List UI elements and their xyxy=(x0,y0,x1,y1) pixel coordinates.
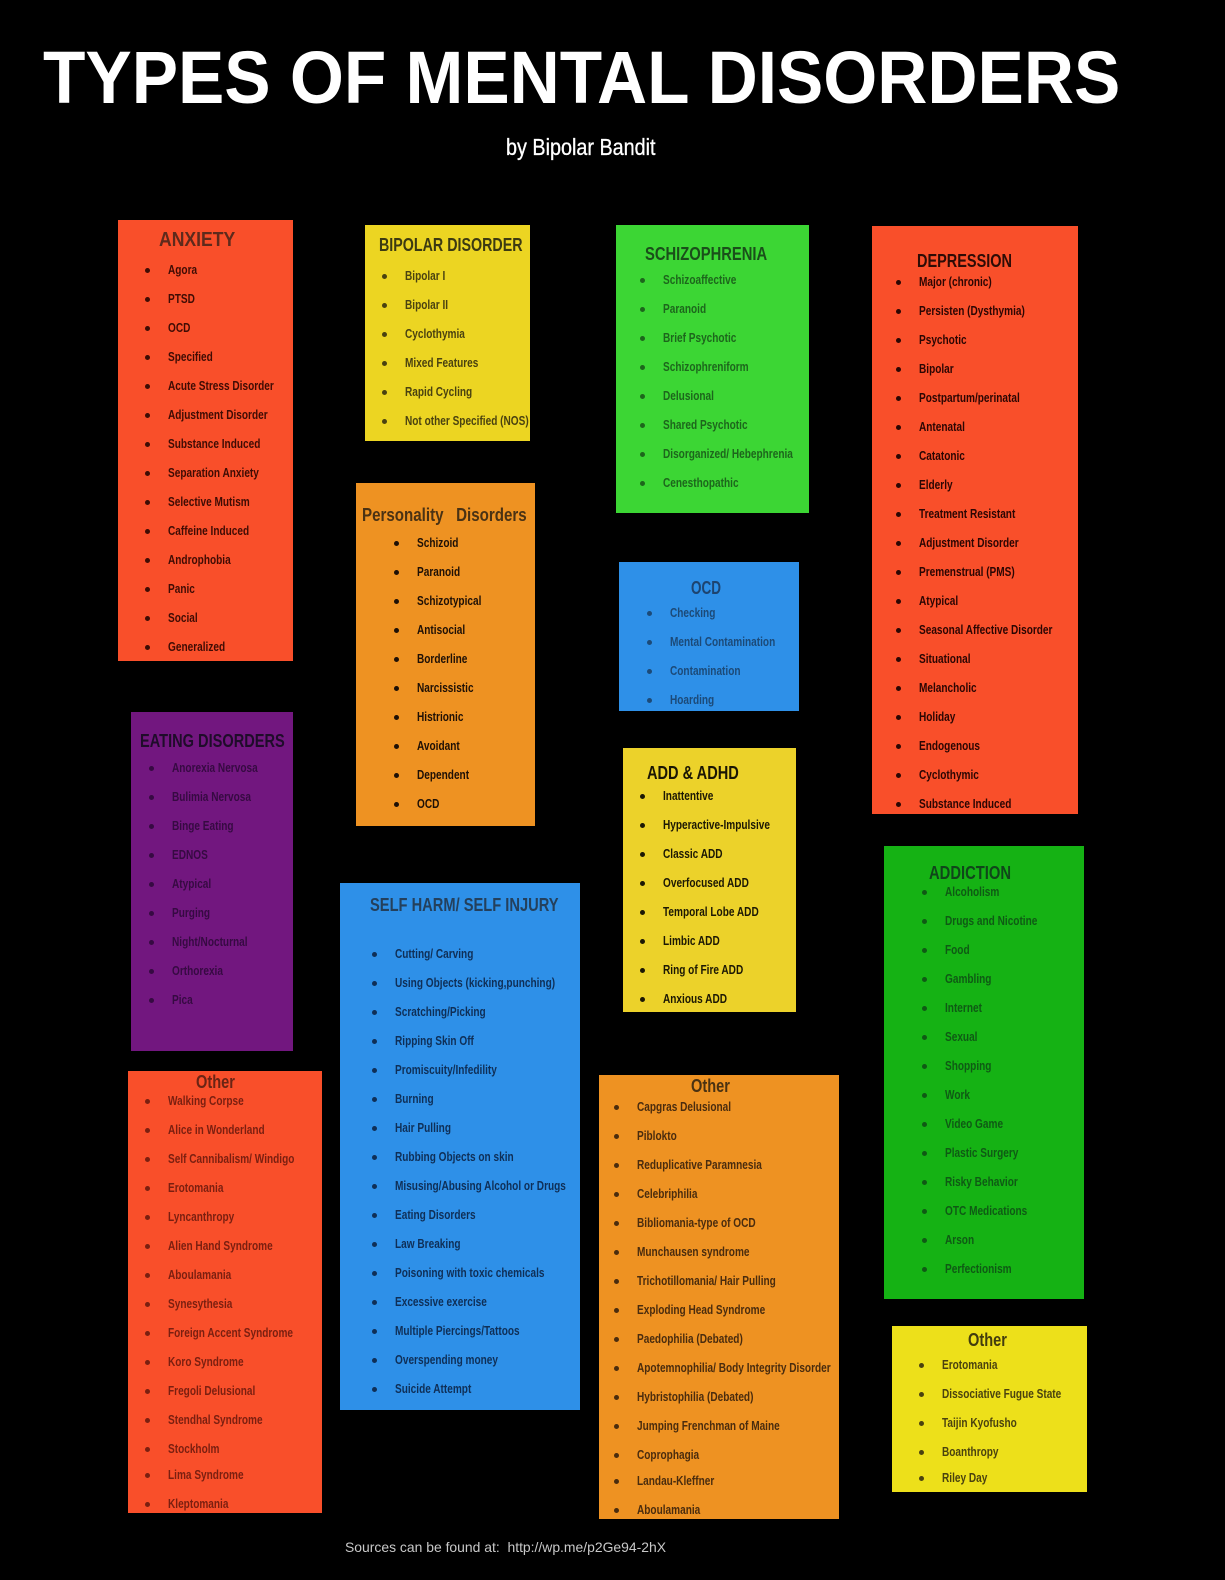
list: other orange types: Jumping Frenchman of Maine xyxy=(637,1418,780,1432)
panel: addiction xyxy=(884,846,1084,1299)
list: anxiety types: Panic xyxy=(168,580,195,596)
list: personality types: Narcissistic xyxy=(417,680,474,694)
list: schizophrenia types: Cenesthopathic xyxy=(663,474,739,490)
list: other orange types: Hybristophilia (Debated) xyxy=(637,1388,753,1404)
list: self harm types: Ripping Skin Off xyxy=(395,1032,474,1048)
list: ocd types xyxy=(647,604,775,706)
list: addiction types: OTC Medications xyxy=(945,1202,1027,1218)
list: depression types: Psychotic xyxy=(919,332,967,346)
list: other orange types: Trichotillomania/ Hair Pulling xyxy=(637,1272,776,1288)
list: addiction types: Alcoholism xyxy=(945,884,999,898)
list: depression types: Seasonal Affective Disorder xyxy=(919,622,1052,636)
heading: self harm: SELF HARM/ SELF INJURY xyxy=(370,895,559,915)
list: depression types: Antenatal xyxy=(919,418,965,434)
list: depression types: Holiday xyxy=(919,708,955,724)
list: anxiety types: OCD xyxy=(168,320,190,334)
heading: addiction: ADDICTION xyxy=(929,863,1011,883)
list: bipolar types: Bipolar I xyxy=(405,268,445,282)
list: other orange types: Piblokto xyxy=(637,1128,677,1142)
list: anxiety types: Specified xyxy=(168,348,213,364)
list: eating disorder types: Purging xyxy=(172,904,210,920)
list: ocd types: Hoarding xyxy=(670,692,714,706)
list: addiction types: Shopping xyxy=(945,1058,991,1072)
list: other yellow types: Riley Day xyxy=(942,1470,987,1484)
list: bipolar types: Cyclothymia xyxy=(405,326,465,340)
list: eating disorder types xyxy=(149,760,258,1006)
list: self harm types: Using Objects (kicking,punching) xyxy=(395,974,555,990)
list: personality types: Dependent xyxy=(417,766,469,782)
list: addiction types: Arson xyxy=(945,1232,974,1246)
list: anxiety types: Generalized xyxy=(168,638,225,654)
list: eating disorder types: Pica xyxy=(172,992,193,1006)
list: ocd types: Mental Contamination xyxy=(670,634,775,648)
list: schizophrenia types: Schizoaffective xyxy=(663,272,736,286)
list: add types: Anxious ADD xyxy=(663,990,727,1006)
heading: bipolar disorder: BIPOLAR DISORDER xyxy=(379,235,523,255)
list: schizophrenia types: Delusional xyxy=(663,388,714,402)
list: ocd types: Checking xyxy=(670,604,715,620)
list: other red types: Alice in Wonderland xyxy=(168,1122,265,1136)
list: other red types: Aboulamania xyxy=(168,1266,231,1282)
heading: other: Other xyxy=(691,1076,730,1096)
list: other orange types: Apotemnophilia/ Body Integrity Disorder xyxy=(637,1360,831,1374)
list: addiction types: Internet xyxy=(945,1000,982,1014)
subtitle: by Bipolar Bandit xyxy=(506,134,656,160)
list: add types: Hyperactive-Impulsive xyxy=(663,816,770,832)
list: eating disorder types: Night/Nocturnal xyxy=(172,934,248,948)
list: depression types: Bipolar xyxy=(919,360,954,376)
list: eating disorder types: Atypical xyxy=(172,876,211,890)
list: other orange types: Coprophagia xyxy=(637,1446,699,1462)
list: depression types: Major (chronic) xyxy=(919,274,992,288)
heading: other: Other xyxy=(196,1072,235,1092)
list: addiction types: Gambling xyxy=(945,970,991,986)
list: other red types: Kleptomania xyxy=(168,1496,228,1510)
list: addiction types: Video Game xyxy=(945,1116,1003,1130)
list: self harm types: Hair Pulling xyxy=(395,1120,451,1134)
list: bipolar types: Not other Specified (NOS) xyxy=(405,412,529,428)
list: addiction types: Work xyxy=(945,1086,970,1102)
list: add types xyxy=(640,788,770,1006)
list: other orange types: Celebriphilia xyxy=(637,1186,697,1200)
list: addiction types: Drugs and Nicotine xyxy=(945,912,1037,928)
list: anxiety types: PTSD xyxy=(168,290,195,306)
list: other red types: Lima Syndrome xyxy=(168,1466,244,1482)
list: addiction types: Plastic Surgery xyxy=(945,1144,1018,1160)
sources note: Sources can be found at: http://wp.me/p2Ge94-2hX xyxy=(345,1539,666,1555)
panel: self harm xyxy=(340,883,580,1410)
panel: other (orange) xyxy=(599,1075,839,1519)
panel: personality disorders xyxy=(356,483,535,826)
list: personality types xyxy=(394,534,481,810)
list: bipolar types: Bipolar II xyxy=(405,296,448,312)
list: other red types: Foreign Accent Syndrome xyxy=(168,1324,293,1340)
list: other orange types: Exploding Head Syndrome xyxy=(637,1302,765,1316)
list: other orange types: Reduplicative Paramnesia xyxy=(637,1156,762,1172)
list: depression types: Atypical xyxy=(919,592,958,608)
list: personality types: Histrionic xyxy=(417,708,463,724)
list: personality types: Antisocial xyxy=(417,622,465,636)
list: depression types: Substance Induced xyxy=(919,796,1011,810)
list: eating disorder types: Binge Eating xyxy=(172,818,234,832)
list: other yellow types: Taijin Kyofusho xyxy=(942,1414,1017,1430)
panel: anxiety xyxy=(118,220,293,661)
list: other red types: Walking Corpse xyxy=(168,1092,244,1108)
title: TYPES OF MENTAL DISORDERS xyxy=(43,36,1120,119)
panel: add and adhd xyxy=(623,748,796,1012)
list: other red types: Erotomania xyxy=(168,1180,223,1194)
list: addiction types xyxy=(922,884,1037,1276)
list: schizophrenia types: Shared Psychotic xyxy=(663,416,748,432)
list: personality types: Schizotypical xyxy=(417,592,481,608)
list: other red types: Stockholm xyxy=(168,1440,220,1456)
list: anxiety types: Substance Induced xyxy=(168,436,260,450)
list: anxiety types: Selective Mutism xyxy=(168,494,250,508)
list: personality types: Avoidant xyxy=(417,738,460,752)
list: add types: Temporal Lobe ADD xyxy=(663,904,759,918)
list: other orange types: Landau-Kleffner xyxy=(637,1472,714,1488)
heading: anxiety: ANXIETY xyxy=(159,229,235,251)
list: eating disorder types: Anorexia Nervosa xyxy=(172,760,258,774)
list: other red types: Lyncanthropy xyxy=(168,1208,234,1224)
list: ocd types: Contamination xyxy=(670,662,741,678)
list: depression types: Catatonic xyxy=(919,448,965,462)
list: depression types: Melancholic xyxy=(919,680,977,694)
list: addiction types: Perfectionism xyxy=(945,1260,1012,1276)
heading: personality disorders: Personality Disorders xyxy=(362,505,527,525)
list: anxiety types: Acute Stress Disorder xyxy=(168,378,274,392)
list: other yellow types: Boanthropy xyxy=(942,1444,999,1458)
list: bipolar types: Rapid Cycling xyxy=(405,384,472,398)
list: schizophrenia types: Brief Psychotic xyxy=(663,330,736,344)
panel: bipolar disorder xyxy=(365,225,530,441)
list: other red types: Stendhal Syndrome xyxy=(168,1412,263,1426)
list: self harm types: Multiple Piercings/Tattoos xyxy=(395,1322,520,1338)
list: depression types: Situational xyxy=(919,650,971,666)
list: other orange types: Paedophilia (Debated) xyxy=(637,1330,743,1346)
list: self harm types: Misusing/Abusing Alcohol or Drugs xyxy=(395,1178,566,1192)
list: depression types: Endogenous xyxy=(919,738,980,752)
heading: other: Other xyxy=(968,1330,1007,1350)
heading: schizophrenia: SCHIZOPHRENIA xyxy=(645,244,767,264)
list: addiction types: Risky Behavior xyxy=(945,1174,1018,1188)
list: other orange types xyxy=(614,1098,831,1516)
panel: depression xyxy=(872,226,1078,814)
list: self harm types: Promiscuity/Infedility xyxy=(395,1062,497,1076)
list: self harm types: Overspending money xyxy=(395,1352,498,1366)
list: add types: Ring of Fire ADD xyxy=(663,962,743,976)
list: self harm types: Poisoning with toxic chemicals xyxy=(395,1264,544,1280)
list: self harm types: Eating Disorders xyxy=(395,1206,476,1222)
list: schizophrenia types: Paranoid xyxy=(663,300,706,316)
list: depression types: Cyclothymic xyxy=(919,766,979,782)
panel: other (yellow) xyxy=(892,1326,1087,1492)
list: self harm types xyxy=(372,946,566,1396)
list: anxiety types: Separation Anxiety xyxy=(168,464,259,480)
list: other yellow types: Erotomania xyxy=(942,1356,997,1372)
list: addiction types: Food xyxy=(945,942,970,956)
list: anxiety types: Adjustment Disorder xyxy=(168,406,268,422)
list: self harm types: Burning xyxy=(395,1090,434,1106)
list: add types: Limbic ADD xyxy=(663,932,720,948)
panel: ocd xyxy=(619,562,799,711)
list: self harm types: Rubbing Objects on skin xyxy=(395,1148,514,1164)
list: self harm types: Scratching/Picking xyxy=(395,1004,486,1018)
list: other red types xyxy=(145,1092,294,1510)
panel: eating disorders xyxy=(131,712,293,1051)
list: depression types xyxy=(896,274,1052,810)
list: other yellow types xyxy=(919,1356,1061,1484)
list: add types: Overfocused ADD xyxy=(663,874,749,890)
heading: eating disorders: EATING DISORDERS xyxy=(140,731,285,751)
list: anxiety types: Caffeine Induced xyxy=(168,522,249,538)
list: self harm types: Excessive exercise xyxy=(395,1294,487,1308)
panel: schizophrenia xyxy=(616,225,809,513)
list: add types: Inattentive xyxy=(663,788,713,802)
list: anxiety types: Social xyxy=(168,610,198,624)
list: eating disorder types: EDNOS xyxy=(172,846,208,862)
list: anxiety types: Agora xyxy=(168,262,197,276)
list: bipolar types xyxy=(382,268,529,428)
list: schizophrenia types: Disorganized/ Hebephrenia xyxy=(663,446,793,460)
list: personality types: OCD xyxy=(417,796,439,810)
heading: depression: DEPRESSION xyxy=(917,251,1012,271)
list: depression types: Adjustment Disorder xyxy=(919,534,1019,550)
list: other red types: Alien Hand Syndrome xyxy=(168,1238,273,1252)
list: other red types: Koro Syndrome xyxy=(168,1354,244,1368)
list: anxiety types: Androphobia xyxy=(168,552,231,566)
list: personality types: Schizoid xyxy=(417,534,458,550)
list: self harm types: Suicide Attempt xyxy=(395,1380,471,1396)
list: eating disorder types: Bulimia Nervosa xyxy=(172,788,251,804)
list: bipolar types: Mixed Features xyxy=(405,354,478,370)
list: other orange types: Bibliomania-type of OCD xyxy=(637,1214,756,1230)
list: other red types: Synesythesia xyxy=(168,1296,232,1310)
list: personality types: Borderline xyxy=(417,650,467,666)
list: eating disorder types: Orthorexia xyxy=(172,962,223,978)
list: other orange types: Munchausen syndrome xyxy=(637,1244,750,1258)
list: personality types: Paranoid xyxy=(417,564,460,578)
list: addiction types: Sexual xyxy=(945,1028,977,1044)
list: other red types: Fregoli Delusional xyxy=(168,1382,255,1398)
heading: ocd: OCD xyxy=(691,578,721,598)
list: depression types: Elderly xyxy=(919,476,953,492)
list: add types: Classic ADD xyxy=(663,846,723,860)
list: depression types: Postpartum/perinatal xyxy=(919,390,1020,404)
list: depression types: Treatment Resistant xyxy=(919,506,1015,520)
list: other yellow types: Dissociative Fugue State xyxy=(942,1386,1061,1400)
list: other orange types: Aboulamania xyxy=(637,1502,700,1516)
list: schizophrenia types: Schizophreniform xyxy=(663,358,749,374)
list: self harm types: Cutting/ Carving xyxy=(395,946,473,960)
list: anxiety types xyxy=(145,262,274,654)
panel: other (red) xyxy=(128,1071,322,1513)
list: depression types: Persisten (Dysthymia) xyxy=(919,302,1025,318)
list: self harm types: Law Breaking xyxy=(395,1236,461,1250)
list: schizophrenia types xyxy=(640,272,793,490)
list: other orange types: Capgras Delusional xyxy=(637,1098,731,1114)
heading: add and adhd: ADD & ADHD xyxy=(647,763,739,783)
list: depression types: Premenstrual (PMS) xyxy=(919,564,1015,578)
list: other red types: Self Cannibalism/ Windigo xyxy=(168,1150,294,1166)
